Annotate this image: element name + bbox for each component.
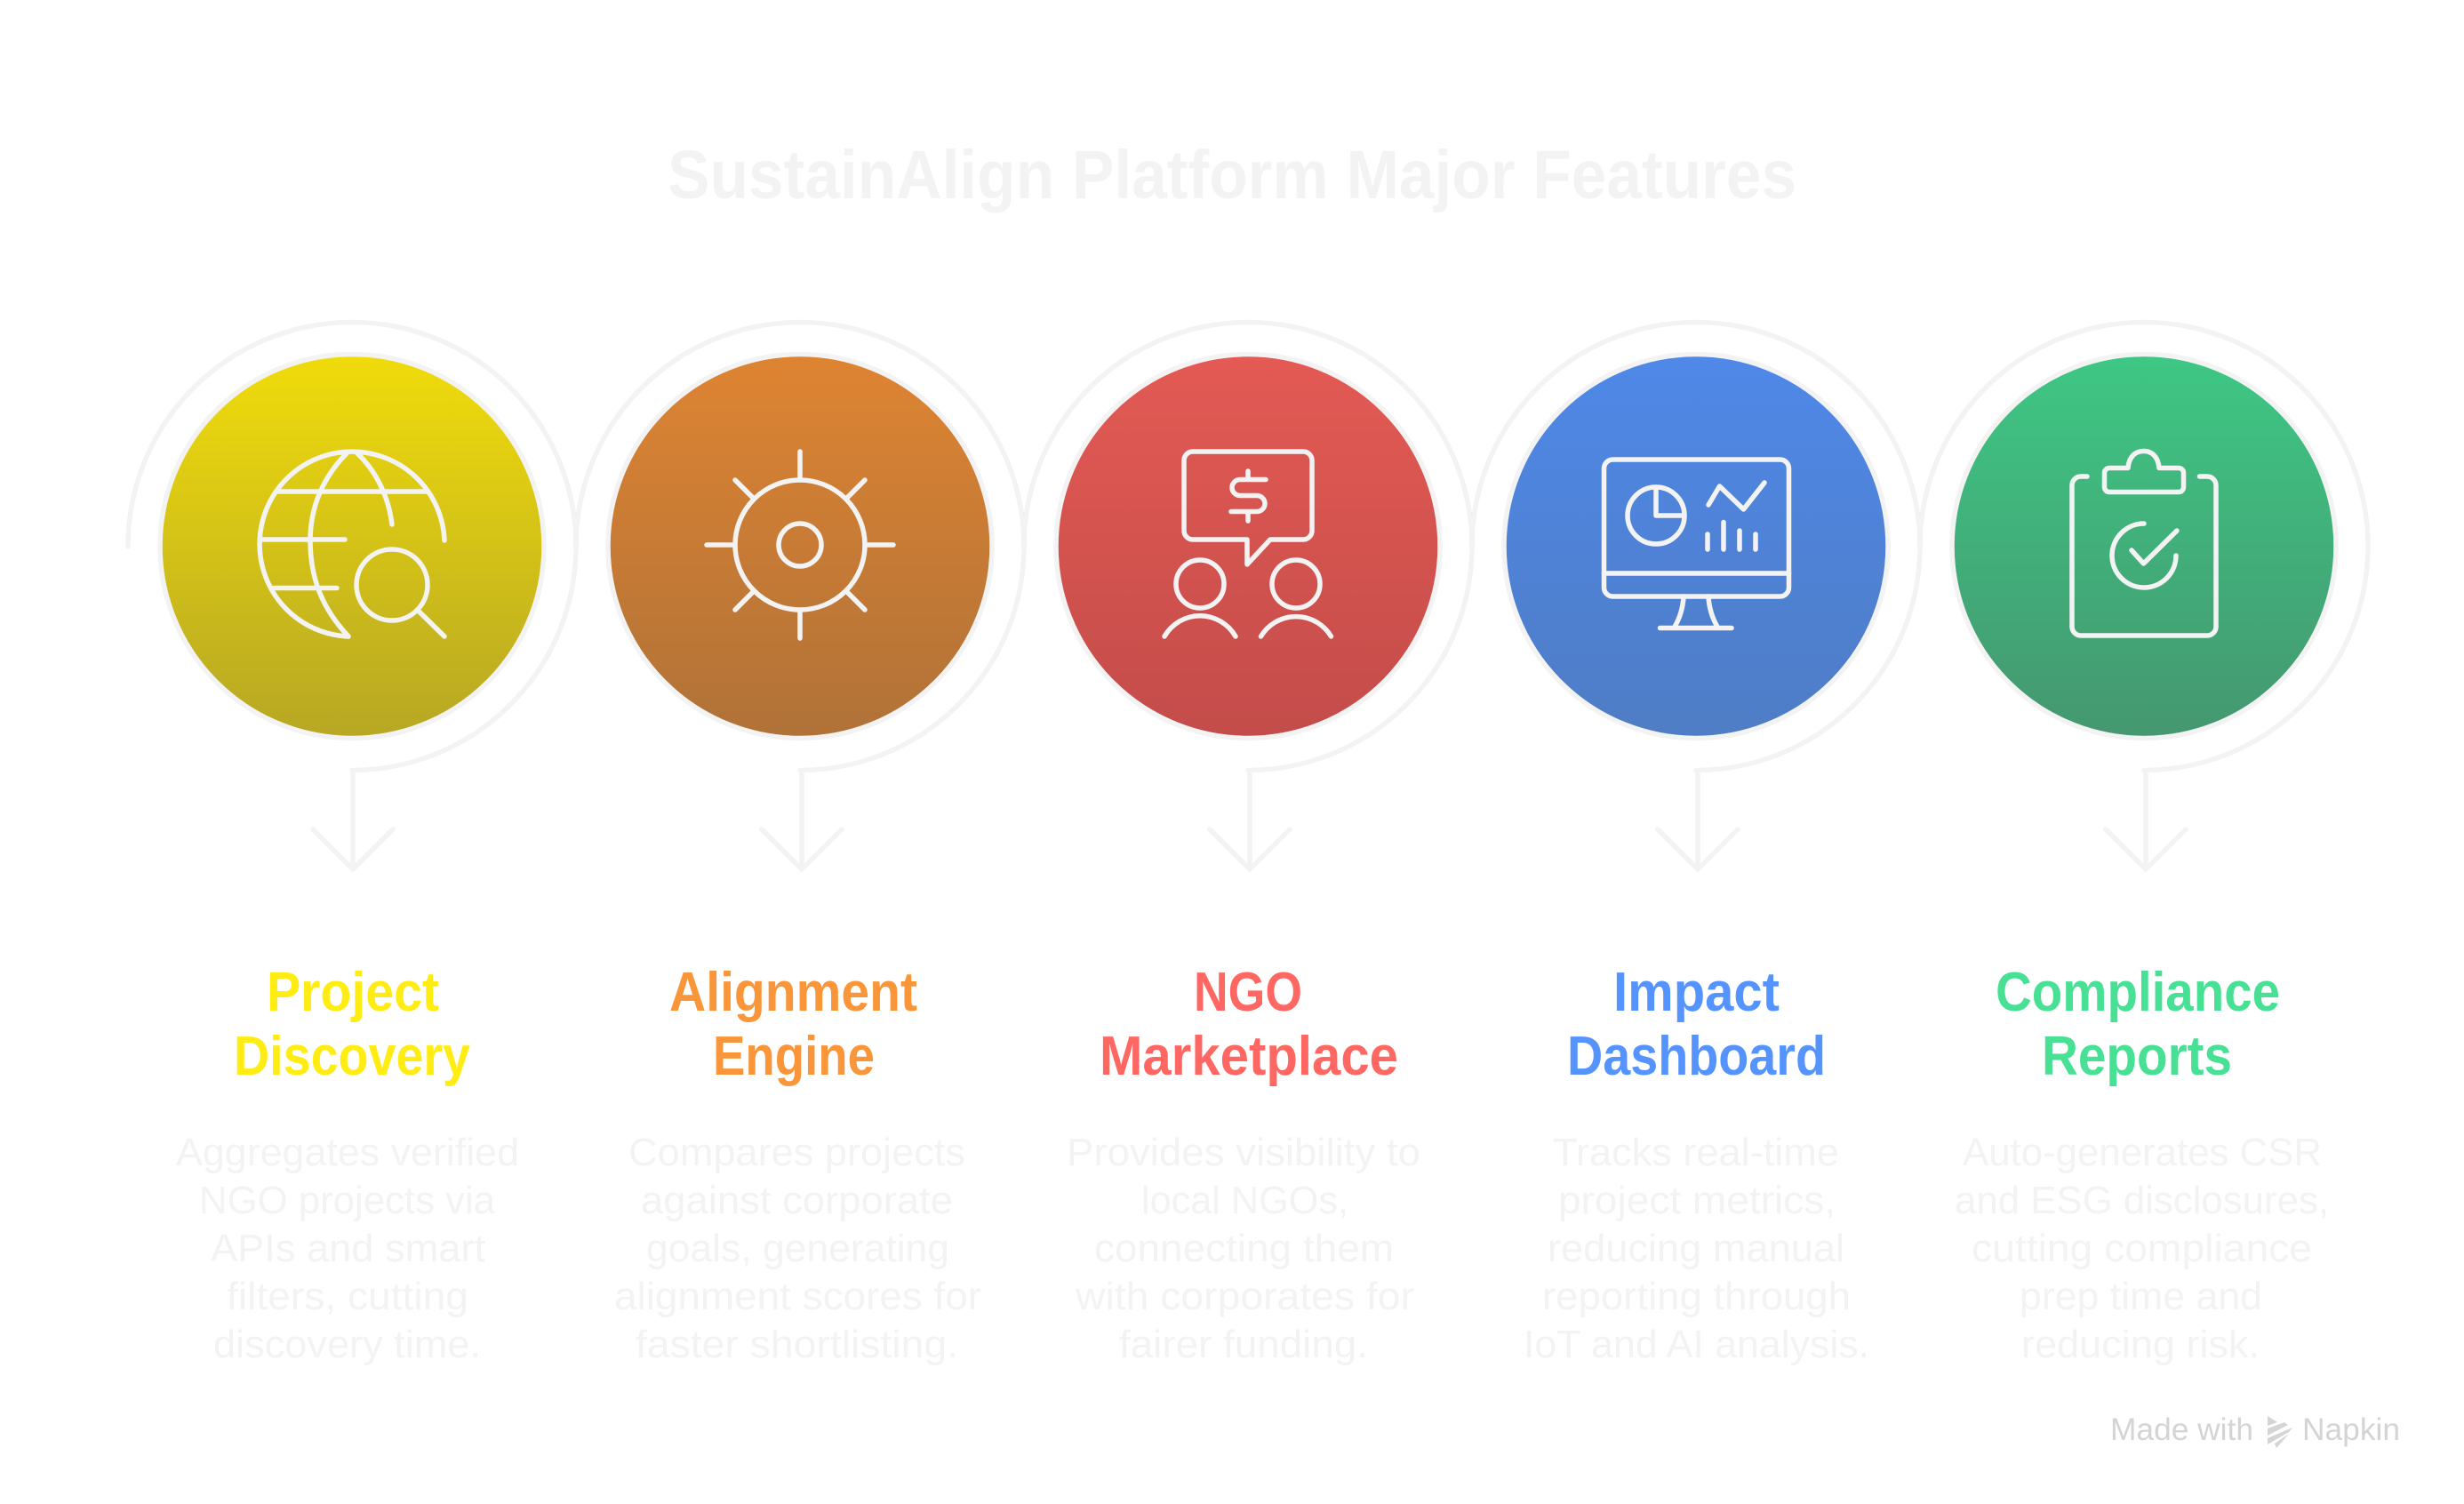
description: with corporates for <box>1075 1275 1414 1318</box>
description: reporting through <box>1542 1275 1851 1318</box>
description: Auto-generates CSR <box>1963 1131 2322 1174</box>
description: APIs and smart <box>211 1227 485 1270</box>
heading <box>234 962 470 1087</box>
icon: clipboard with check <box>2072 452 2216 636</box>
coloured circle <box>1504 354 1888 738</box>
description: cutting compliance <box>1972 1227 2312 1270</box>
heading: NGO <box>1194 962 1302 1023</box>
panel: NGO Marketplace <box>1024 323 1472 1366</box>
description: reducing manual <box>1548 1227 1844 1270</box>
footer: made with napkin: Napkin <box>2302 1412 2400 1447</box>
coloured circle <box>160 354 544 738</box>
panel: Impact Dashboard <box>1472 323 1920 1366</box>
description: NGO projects via <box>199 1179 496 1222</box>
description: Aggregates verified <box>176 1131 519 1174</box>
connector ring <box>1024 323 1472 869</box>
heading: Marketplace <box>1100 1026 1398 1087</box>
panel: Compliance Reports <box>1920 323 2368 1366</box>
description: connecting them <box>1094 1227 1394 1270</box>
description: project metrics, <box>1558 1179 1836 1222</box>
description: and ESG disclosures, <box>1955 1179 2329 1222</box>
description: filters, cutting <box>227 1275 468 1318</box>
panel: Alignment Engine <box>576 323 1024 1366</box>
description <box>1955 1131 2329 1366</box>
description: Provides visibility to <box>1067 1131 1420 1174</box>
description: alignment scores for <box>614 1275 981 1318</box>
heading: Discovery <box>234 1026 470 1087</box>
description: local NGOs, <box>1141 1179 1348 1222</box>
coloured circle <box>1056 354 1440 738</box>
icon: funding chat between two people <box>1164 452 1332 636</box>
footer: made with napkin: Made with <box>2110 1412 2253 1447</box>
heading: Alignment <box>669 962 917 1023</box>
connector ring <box>1472 323 1920 869</box>
connector ring <box>128 323 576 869</box>
arrow head <box>1658 829 1738 869</box>
heading: Engine <box>713 1026 875 1087</box>
description: Compares projects <box>628 1131 965 1174</box>
arrow head <box>2106 829 2186 869</box>
heading: Compliance <box>1996 962 2280 1023</box>
icon: globe with magnifier <box>260 452 444 636</box>
description: discovery time. <box>213 1323 481 1366</box>
description <box>1524 1131 1869 1366</box>
heading: Project <box>267 962 439 1023</box>
coloured circle <box>608 354 992 738</box>
icon: dashboard monitor <box>1604 460 1788 628</box>
description <box>1067 1131 1420 1366</box>
heading <box>1567 962 1826 1087</box>
description: against corporate <box>641 1179 953 1222</box>
panel: Project Discovery <box>128 323 576 1366</box>
coloured circle <box>1952 354 2336 738</box>
description: faster shortlisting. <box>636 1323 958 1366</box>
description: Tracks real-time <box>1553 1131 1839 1174</box>
connector ring <box>576 323 1024 869</box>
arrow head <box>762 829 842 869</box>
connector ring <box>1920 323 2368 869</box>
heading <box>1100 962 1398 1087</box>
description: prep time and <box>2020 1275 2262 1318</box>
description: reducing risk. <box>2021 1323 2260 1366</box>
description: fairer funding. <box>1119 1323 1368 1366</box>
heading: Impact <box>1613 962 1780 1023</box>
heading: Reports <box>2042 1026 2232 1087</box>
icon: napkin logo <box>2268 1416 2292 1448</box>
heading <box>1996 962 2280 1087</box>
arrow head <box>1210 829 1290 869</box>
icon: gear target <box>707 452 893 638</box>
description <box>614 1131 981 1366</box>
arrow head <box>313 829 393 869</box>
description: goals, generating <box>646 1227 949 1270</box>
description <box>176 1131 519 1366</box>
heading: Dashboard <box>1567 1026 1826 1087</box>
description: IoT and AI analysis. <box>1524 1323 1869 1366</box>
footer: made with napkin <box>2110 1412 2400 1448</box>
heading <box>669 962 917 1087</box>
title: SustainAlign Platform Major Features <box>668 137 1796 213</box>
